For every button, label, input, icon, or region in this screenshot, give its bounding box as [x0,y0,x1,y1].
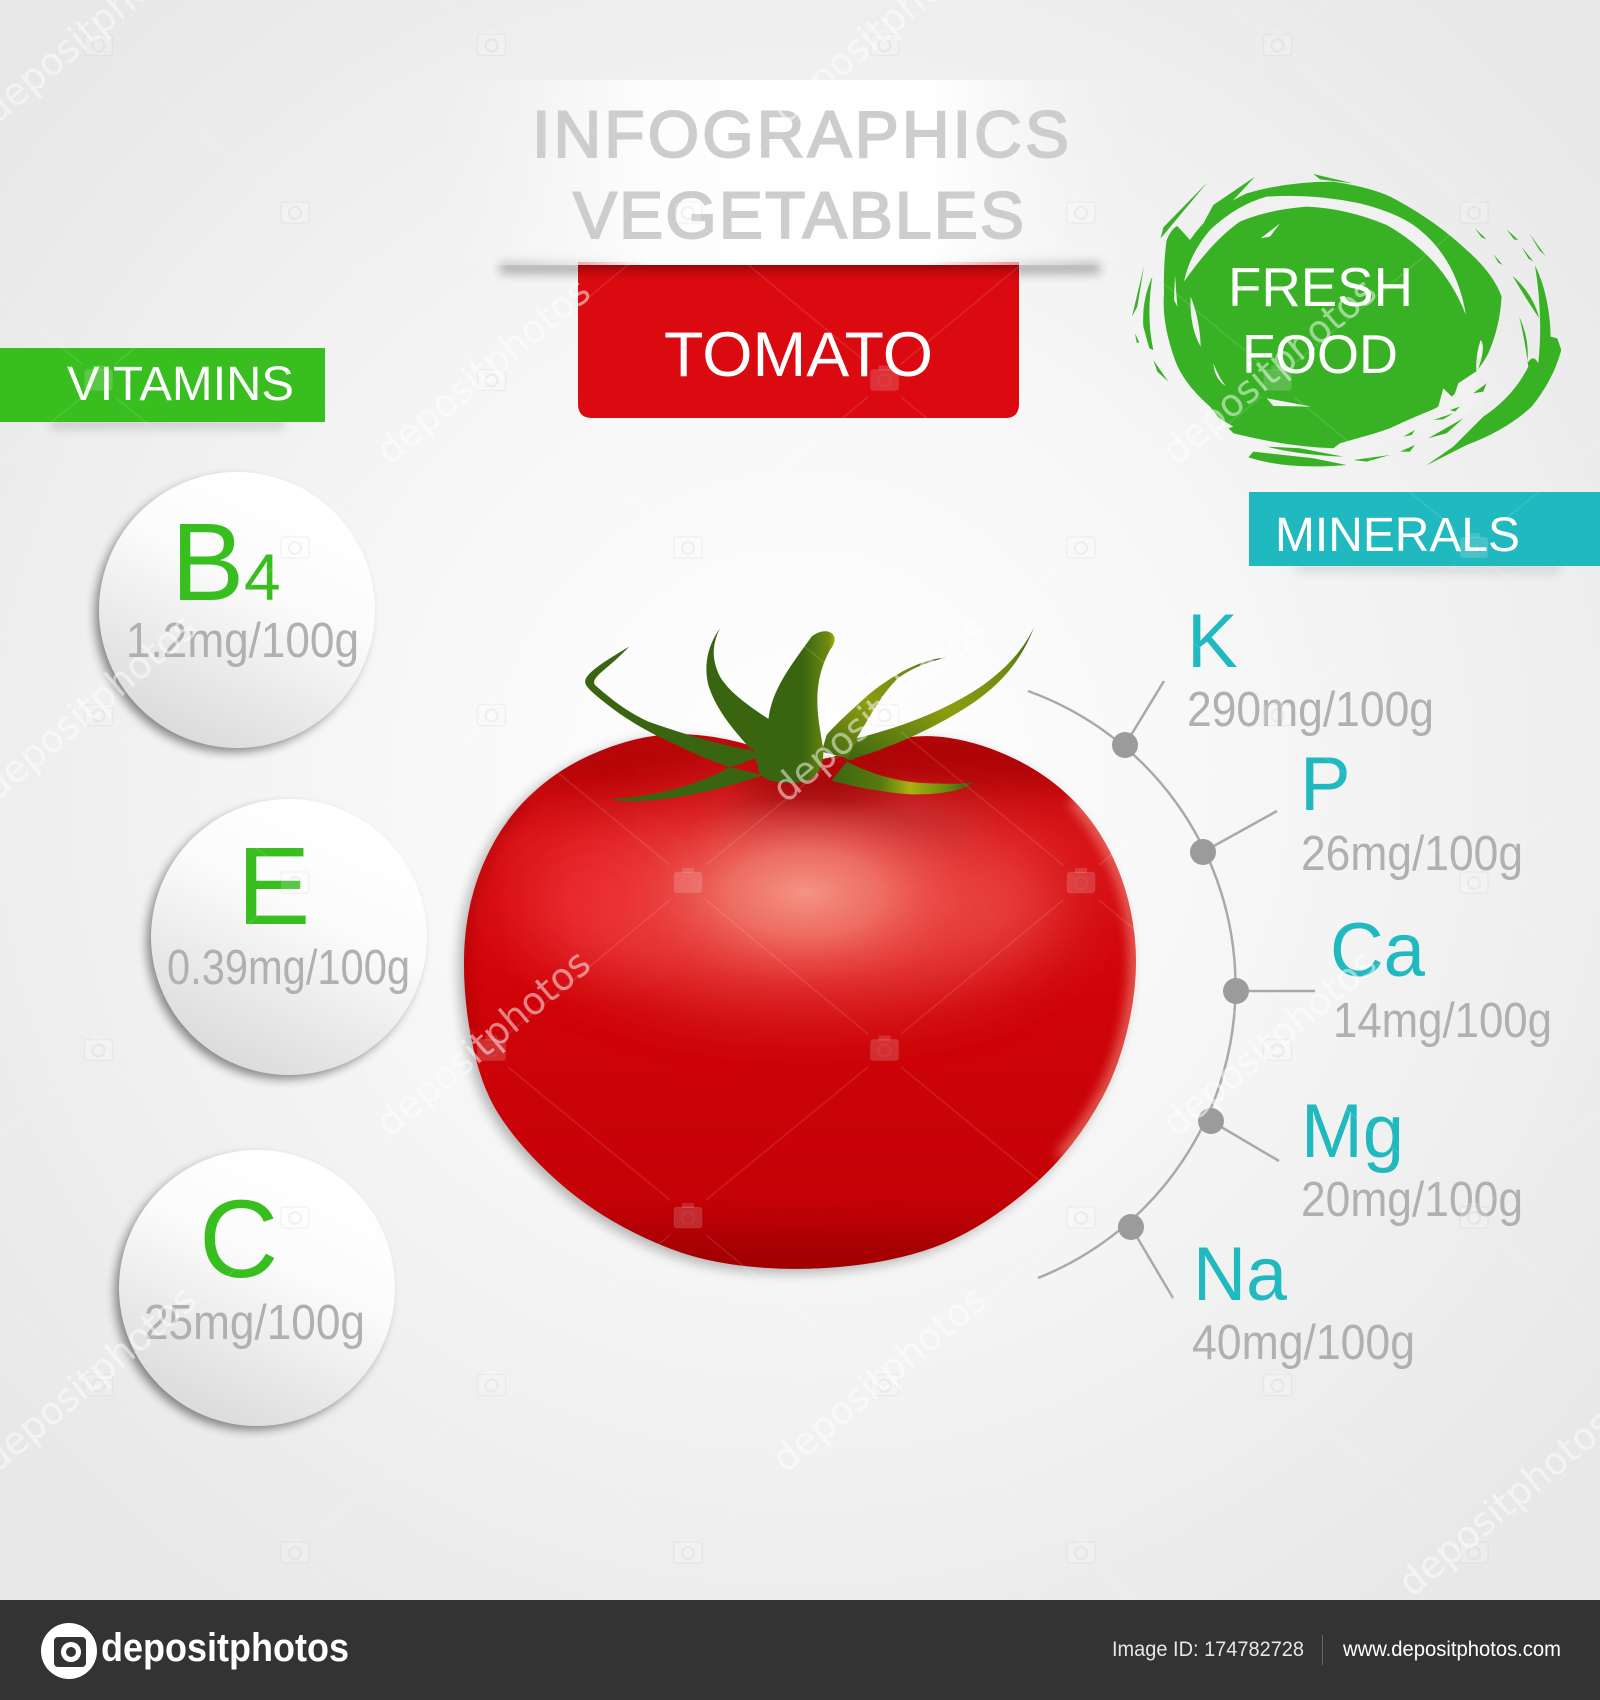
vitamin C circle [115,1150,395,1430]
badge text: food: FOOD [1242,323,1398,385]
connector Ca [1236,990,1315,992]
tomato label [578,262,1019,418]
vitamin name: C [199,1178,278,1301]
mineral Mg: Mg [1301,1089,1404,1174]
tomato label: TOMATO [664,320,933,390]
connector K [1125,681,1164,745]
amount: 290mg/100g [1187,683,1434,737]
amount: 20mg/100g [1301,1173,1523,1227]
connector P [1203,811,1277,852]
title banner [440,80,1135,265]
mineral Mg [1301,1089,1523,1227]
title text line 2: VEGETABLES [573,178,1024,252]
badge: fresh food [1132,174,1561,466]
sepal: upper centre [706,628,773,750]
badge: left ring strokes [1132,174,1353,382]
image id: Image ID: 174782728 [1112,1638,1304,1661]
badge: bottom-right worn edge [1347,370,1483,446]
badge: brush blob [1164,182,1502,448]
amount: 26mg/100g [1301,827,1523,881]
mineral P [1300,742,1523,881]
mineral P: P [1300,742,1351,827]
stock watermarks: depositphotos [368,269,599,473]
footer logo wordmark: depositphotos [101,1626,349,1670]
vitamin name: E [237,825,310,948]
sepal: lower left [610,767,763,801]
amount: 40mg/100g [1192,1316,1415,1370]
central stem [753,631,835,783]
footer bar [0,1600,1600,1700]
vitamin B4 circle [95,472,375,752]
connector Na [1131,1227,1173,1298]
tomato cast shadow [459,738,1131,1273]
mineral K: K [1187,599,1238,684]
vitamin name: B [171,501,244,624]
mineral Na: Na [1193,1232,1288,1317]
mineral Ca: Ca [1330,908,1426,993]
vitamin amount: 25mg/100g [144,1296,365,1350]
vitamin subscript: 4 [244,540,281,614]
website: www.depositphotos.com [1342,1638,1561,1661]
vitamin amount: 0.39mg/100g [167,941,410,995]
footer logo icon [41,1623,97,1679]
badge: white brush gap [1174,196,1483,430]
badge text: fresh: FRESH [1228,256,1413,318]
sepal: far right [847,627,1034,761]
tomato body [450,720,1150,1282]
stock watermarks: depositphotos [764,607,995,811]
sepal: lower right [832,762,974,794]
tomato illustration [450,627,1150,1282]
vitamin amount: 1.2mg/100g [126,614,359,668]
stock watermarks: depositphotos [368,941,599,1145]
mineral K [1187,599,1434,737]
mineral Ca [1330,908,1552,1048]
mineral Na [1192,1232,1415,1370]
vitamins label: VITAMINS [67,358,294,411]
minerals arc [1028,681,1315,1298]
amount: 14mg/100g [1333,994,1552,1048]
sepal: thin right [822,658,946,760]
arc dots [1112,732,1249,1240]
stock watermarks: depositphotos [764,1277,995,1481]
vitamin E circle [147,799,427,1079]
stock watermarks: depositphotos [1154,269,1385,473]
minerals label [1249,492,1600,573]
badge: bottom ring strokes [1248,383,1487,466]
tomato calyx [585,627,1034,801]
minerals label: MINERALS [1275,509,1520,562]
vitamins label [0,348,325,429]
connector Mg [1211,1121,1279,1161]
stock watermarks: depositphotos [1154,941,1385,1145]
sepal: far left [585,647,760,767]
title text line 1: INFOGRAPHICS [532,97,1069,171]
title banner shadow [500,262,1100,274]
badge: right ring strokes [1426,228,1561,466]
